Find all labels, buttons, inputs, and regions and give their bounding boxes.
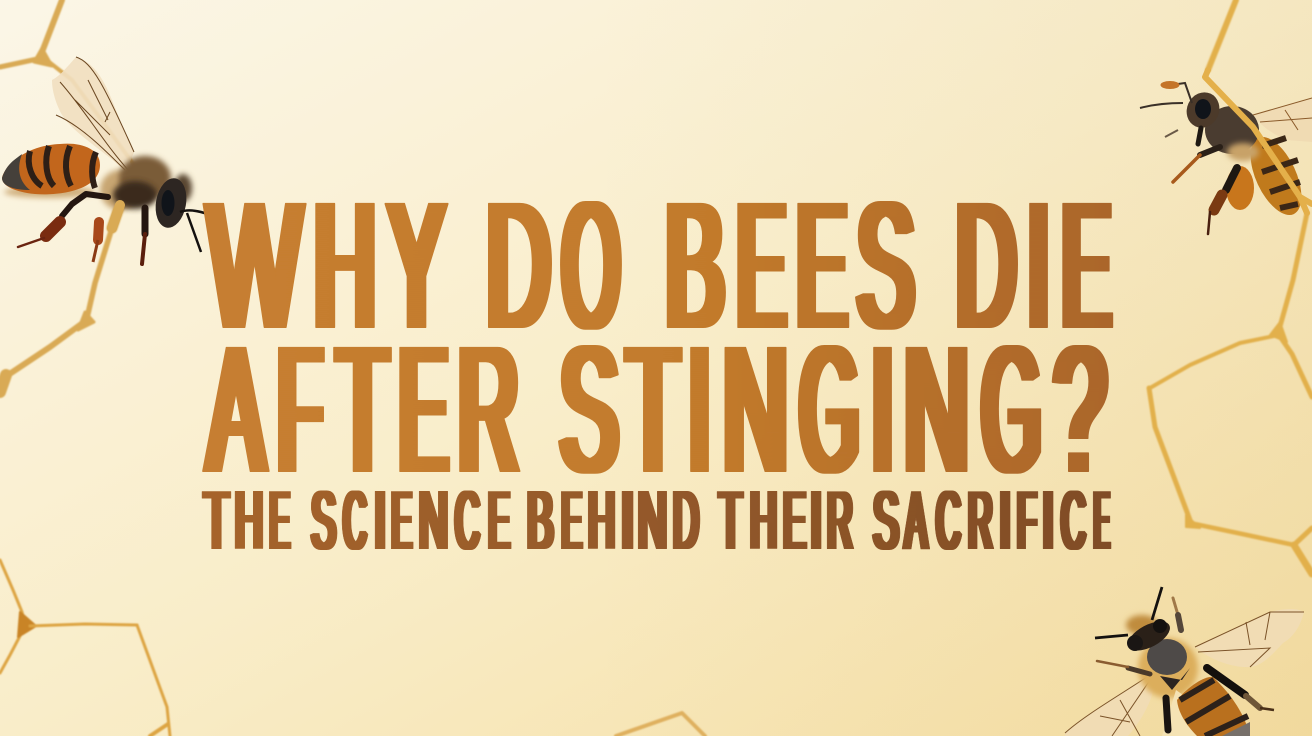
title bbox=[208, 165, 1110, 509]
thorax bbox=[1205, 106, 1259, 154]
subtitle: I bbox=[1042, 474, 1054, 566]
subtitle: I bbox=[810, 474, 822, 566]
antennae bbox=[1140, 83, 1192, 108]
subtitle: C bbox=[1061, 474, 1085, 566]
fur bbox=[100, 170, 140, 210]
head bbox=[174, 174, 192, 202]
subtitle: E bbox=[270, 474, 289, 566]
title line 2: A bbox=[208, 309, 264, 509]
subtitle: R bbox=[827, 474, 852, 566]
title line 1: W bbox=[208, 165, 301, 365]
title line 2 bbox=[208, 309, 1106, 509]
wings bbox=[52, 57, 134, 172]
honeycomb: top left bbox=[0, 0, 134, 392]
abdomen bbox=[1177, 677, 1250, 736]
subtitle: I bbox=[620, 474, 635, 566]
legs bbox=[62, 194, 108, 216]
icon: bee top right bbox=[1140, 70, 1312, 234]
head bbox=[1124, 615, 1174, 657]
subtitle: N bbox=[638, 474, 667, 566]
honeycomb: bottom center bbox=[616, 713, 705, 736]
title line 2: T bbox=[337, 309, 388, 509]
subtitle: F bbox=[1017, 474, 1036, 566]
title line 1: E bbox=[797, 165, 846, 365]
subtitle: C bbox=[343, 474, 366, 566]
wings bbox=[1065, 609, 1304, 736]
subtitle: E bbox=[392, 474, 411, 566]
honeycomb: right bbox=[1149, 0, 1312, 574]
honeycomb: bottom left bbox=[0, 560, 170, 736]
title line 2: ? bbox=[1054, 309, 1106, 509]
thorax bbox=[1147, 639, 1187, 675]
title line 2: N bbox=[904, 309, 969, 509]
title line 2: G bbox=[800, 309, 859, 509]
icon: bee bottom right bbox=[1065, 587, 1304, 736]
title line 1: D bbox=[487, 165, 550, 365]
title line 1: D bbox=[956, 165, 1016, 365]
subtitle: I bbox=[999, 474, 1011, 566]
wing bbox=[1253, 98, 1312, 142]
title line 2: N bbox=[723, 309, 788, 509]
abdomen bbox=[1240, 129, 1312, 223]
subtitle: S bbox=[873, 474, 899, 566]
subtitle: E bbox=[488, 474, 510, 566]
subtitle: A bbox=[905, 474, 927, 566]
text: E bbox=[1062, 165, 1110, 365]
subtitle: H bbox=[235, 474, 263, 566]
title line 1: H bbox=[314, 165, 376, 365]
subtitle: C bbox=[936, 474, 960, 566]
title line 2: T bbox=[627, 309, 679, 509]
subtitle bbox=[204, 474, 1109, 566]
title line 2: F bbox=[278, 309, 322, 509]
title line 2: E bbox=[399, 309, 447, 509]
subtitle: H bbox=[750, 474, 777, 566]
subtitle: I bbox=[374, 474, 386, 566]
legs bbox=[1200, 147, 1220, 155]
legs bbox=[1207, 668, 1245, 695]
subtitle: T bbox=[204, 474, 229, 566]
title line 2: G bbox=[982, 309, 1041, 509]
subtitle: S bbox=[311, 474, 336, 566]
subtitle: R bbox=[968, 474, 992, 566]
title line 1: S bbox=[857, 165, 914, 365]
subtitle: T bbox=[719, 474, 742, 566]
head bbox=[1181, 87, 1225, 133]
title line 2: I bbox=[689, 309, 710, 509]
title line 1: I bbox=[1028, 165, 1049, 365]
antennae bbox=[180, 210, 226, 252]
title line 1: B bbox=[666, 165, 725, 365]
comb over bee bbox=[1205, 70, 1312, 213]
title line 1: Y bbox=[389, 165, 444, 365]
subtitle: H bbox=[588, 474, 615, 566]
antennae bbox=[1095, 587, 1162, 638]
title line 1: E bbox=[737, 165, 785, 365]
subtitle: B bbox=[527, 474, 554, 566]
fur bbox=[1138, 638, 1198, 698]
title line 1: O bbox=[562, 165, 620, 365]
title line 2: R bbox=[458, 309, 518, 509]
text: E bbox=[1094, 474, 1109, 566]
icon: bee top left bbox=[2, 57, 226, 264]
subtitle: E bbox=[562, 474, 581, 566]
comb over bee bbox=[112, 205, 120, 228]
title line 1 bbox=[208, 165, 1110, 365]
title line 2: S bbox=[560, 309, 618, 509]
subtitle: E bbox=[783, 474, 806, 566]
subtitle: D bbox=[673, 474, 699, 566]
subtitle: C bbox=[455, 474, 479, 566]
abdomen bbox=[4, 186, 96, 198]
subtitle: N bbox=[419, 474, 448, 566]
title line 2: I bbox=[872, 309, 893, 509]
